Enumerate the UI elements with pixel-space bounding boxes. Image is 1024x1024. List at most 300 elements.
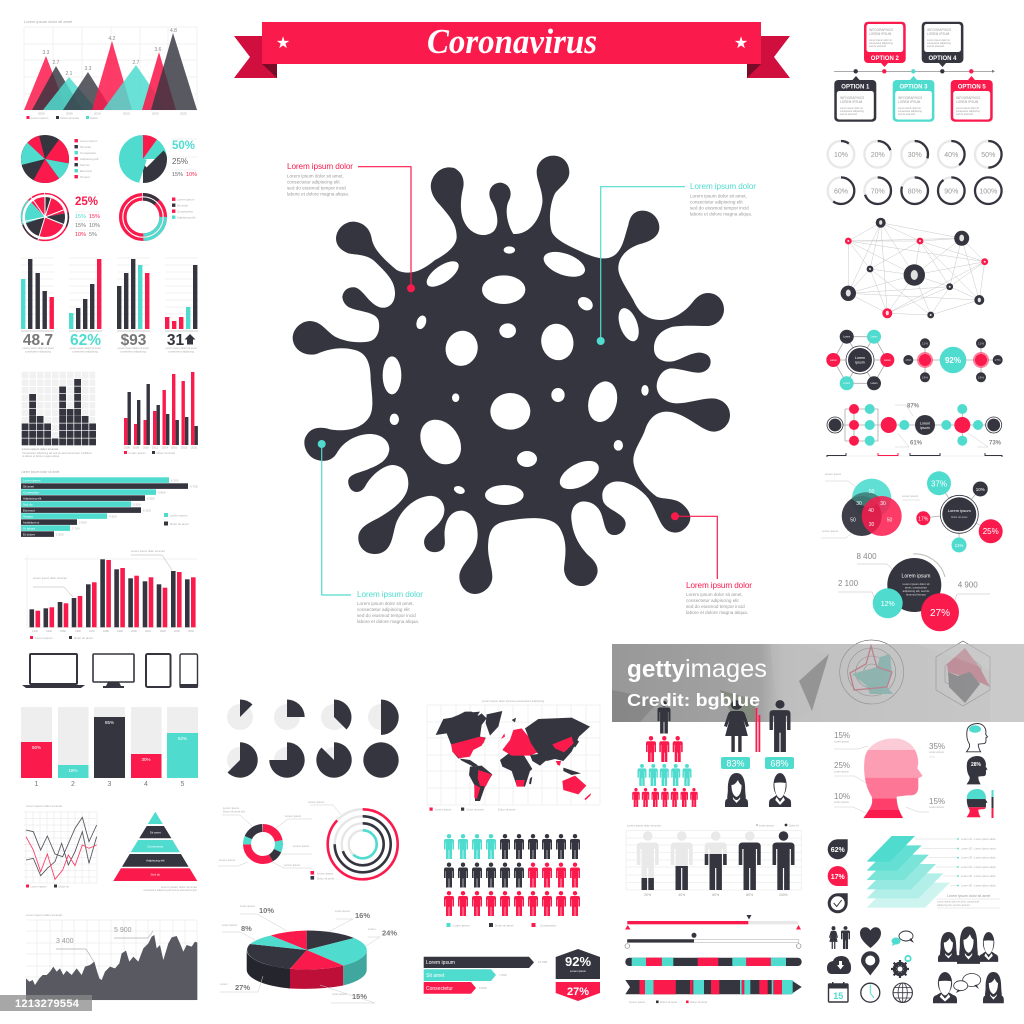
icon: couple bbox=[829, 926, 850, 949]
3d pie chart: 24% bbox=[382, 928, 397, 938]
3d pie chart: 8% bbox=[241, 924, 252, 933]
donut chart with double ring: Sit amet bbox=[177, 204, 188, 208]
option boxes timeline: OPTION 1 bbox=[841, 84, 870, 90]
callout: bottom left: sed do eiusmod tempor incid bbox=[357, 613, 416, 618]
option boxes timeline: LOREM IPSUM bbox=[956, 100, 979, 104]
icon: devices bbox=[22, 654, 198, 688]
92 percent cluster: 18% bbox=[922, 376, 928, 380]
venn diagram: 30 bbox=[856, 501, 862, 507]
callout: bottom left: consectetur adipiscing elit bbox=[357, 607, 410, 612]
horizontal bar chart bbox=[21, 470, 198, 537]
bubble cluster: 11% bbox=[955, 543, 963, 548]
triangle chart: 2.7 bbox=[133, 60, 140, 66]
icon: head set: 28% bbox=[971, 762, 982, 768]
option boxes timeline: LOREM IPSUM bbox=[898, 100, 921, 104]
teardrop stats: 62% bbox=[831, 847, 845, 854]
horizontal bar chart: Adipiscing elit bbox=[23, 496, 42, 500]
triangle chart: Dolor sit amet bbox=[60, 116, 79, 120]
progress column chart: 85% bbox=[105, 720, 114, 725]
option boxes timeline: sed do eiusmod bbox=[840, 113, 858, 116]
option boxes timeline: INFOGRAPHICS bbox=[869, 28, 893, 32]
callout: top right: Lorem ipsum dolor sit amet, bbox=[690, 194, 747, 198]
callout: top left bbox=[287, 162, 415, 292]
chain node diagram: Lorem bbox=[920, 422, 930, 426]
horizontal bar chart: 5 500 bbox=[133, 502, 141, 506]
arrow bars: 10 000 bbox=[538, 960, 548, 964]
world map: Dolor sit amet bbox=[466, 808, 484, 812]
pie chart 2 with percentages: 15% bbox=[172, 172, 183, 178]
progress column chart: 62% bbox=[178, 736, 187, 741]
watermark id: 1213279554 bbox=[15, 998, 80, 1010]
watermark id bbox=[0, 995, 92, 1011]
donut chart with callouts: Lorem ipsum bbox=[223, 806, 240, 810]
horizontal bar chart: 9 700 bbox=[190, 484, 198, 488]
column chart with callouts: 2040 bbox=[188, 629, 194, 633]
horizontal bar chart: Et dolore bbox=[23, 532, 35, 536]
arrow bars: Sit amet bbox=[426, 973, 445, 979]
option boxes timeline: consectetur adipiscing bbox=[927, 42, 951, 45]
pie chart 3 exploded: 10% bbox=[89, 223, 100, 229]
triangle chart: 2025 bbox=[180, 112, 187, 116]
paired bar chart: 2010 bbox=[143, 446, 150, 450]
donut chart with callouts: Lorem ipsum bbox=[219, 858, 236, 862]
watermark text bbox=[627, 655, 767, 710]
world map: Lorem ipsum dolor sit amet consectetur adipiscing bbox=[482, 699, 545, 703]
paired bar chart: 2016 bbox=[171, 446, 178, 450]
progress column chart: 30% bbox=[141, 757, 151, 762]
pyramid chart: Sed do bbox=[151, 872, 160, 876]
pyramid chart: Adipiscing elit bbox=[146, 858, 165, 862]
pie chart 1: Sit amet bbox=[80, 145, 91, 149]
icon: calendar bbox=[828, 982, 848, 1002]
percentage ring set: 80% bbox=[908, 188, 922, 195]
column chart with callouts: Lorem ipsum dolor sit amet bbox=[33, 576, 67, 580]
concentric ring chart: Lorem ipsum bbox=[317, 872, 334, 876]
icon: globe bbox=[893, 983, 912, 1002]
option boxes timeline: LOREM IPSUM bbox=[869, 32, 892, 36]
head segmented chart: 15% bbox=[834, 731, 850, 740]
percentage ring set: 50% bbox=[981, 152, 995, 159]
callout: bottom left bbox=[318, 440, 423, 624]
hexagon stats: 92% bbox=[565, 954, 591, 969]
watermark overlay bbox=[612, 644, 1024, 722]
horizontal bar chart: Sit amet bbox=[23, 484, 34, 488]
progress column chart: 4 bbox=[144, 781, 148, 788]
big bubble stats: 4 900 bbox=[958, 580, 978, 590]
people pictogram grid bbox=[444, 834, 580, 928]
icon: heart bbox=[860, 927, 881, 948]
percentage ring set: 10% bbox=[834, 152, 848, 159]
hexagon node diagram: Lorem bbox=[871, 382, 877, 385]
paired bar chart: 2006 bbox=[124, 446, 131, 450]
chain node diagram bbox=[827, 404, 1002, 457]
horizontal bar chart: Lorem ipsum bbox=[23, 478, 41, 482]
option boxes timeline: sed do eiusmod bbox=[956, 113, 974, 116]
horizontal bar chart: Tempor bbox=[23, 514, 33, 518]
column chart with callouts: 1950 bbox=[60, 629, 66, 633]
callout: top right: consectetur adipiscing elit bbox=[690, 200, 743, 204]
column chart with callouts: 1960 bbox=[75, 629, 81, 633]
callout: bottom right bbox=[671, 512, 752, 615]
pie chart 1: Consectetur bbox=[80, 151, 96, 155]
arrow bars: 7 000 bbox=[499, 973, 507, 977]
big bubble stats: 8 400 bbox=[856, 552, 877, 561]
horizontal bar chart: Sed do bbox=[23, 502, 33, 506]
line chart: Dolor sit bbox=[58, 884, 69, 888]
hexagon node diagram: Lorem bbox=[855, 356, 865, 360]
donut chart with callouts: Lorem ipsum bbox=[284, 863, 301, 867]
triangle chart: 3.3 bbox=[85, 66, 92, 72]
venn diagram: Lorem ipsum bbox=[902, 494, 919, 498]
triangle chart: Lorem ipsum bbox=[31, 116, 49, 120]
people pictogram grid: Consectetur bbox=[540, 924, 556, 928]
paired bar chart bbox=[124, 372, 198, 455]
progress column chart: 18% bbox=[68, 768, 78, 773]
virus illustration bbox=[293, 156, 730, 594]
option boxes timeline: sed do eiusmod bbox=[927, 45, 945, 48]
option boxes timeline: OPTION 5 bbox=[958, 84, 986, 90]
arrow bars: Consectetur bbox=[426, 986, 453, 992]
horizontal bar chart: 4 300 bbox=[109, 514, 117, 518]
donut chart with callouts: Lorem ipsum bbox=[293, 844, 310, 848]
title banner: ★ bbox=[276, 35, 290, 52]
pictogram height chart: 80% bbox=[746, 893, 753, 897]
area chart: Lorem ipsum dolor sit amet bbox=[26, 913, 62, 917]
callout: top left: consectetur adipiscing elit bbox=[287, 180, 340, 184]
option boxes timeline: sed do eiusmod bbox=[869, 45, 887, 48]
paired bar chart: 2014 bbox=[162, 446, 169, 450]
pie chart 3 exploded bbox=[22, 194, 100, 240]
horizontal bar chart: Lorem ipsum dolor sit amet bbox=[21, 470, 60, 474]
head segmented chart: 25% bbox=[834, 761, 850, 770]
92 percent cluster: 16% bbox=[905, 358, 912, 362]
chain node diagram: 87% bbox=[907, 404, 920, 410]
hexagon stats: Lorem ipsum bbox=[570, 969, 587, 973]
option boxes timeline: INFOGRAPHICS bbox=[840, 96, 864, 100]
option boxes timeline: consectetur adipiscing bbox=[956, 110, 980, 113]
bar chart group with stats: 31 bbox=[167, 332, 184, 349]
horizontal bar chart: Consectetur bbox=[23, 490, 39, 494]
option boxes timeline: Lorem ipsum dolor sit bbox=[898, 107, 921, 110]
big bubble stats: 12% bbox=[881, 601, 895, 608]
pie chart 2 with percentages: 50% bbox=[172, 140, 195, 152]
icon: clock bbox=[861, 983, 880, 1002]
big bubble stats: 27% bbox=[930, 608, 950, 619]
column chart with callouts: 1980 bbox=[103, 629, 109, 633]
head segmented chart: Lorem ipsum bbox=[929, 750, 944, 754]
horizontal bar chart: 2 700 bbox=[72, 526, 80, 530]
layered stack chart bbox=[867, 836, 1000, 908]
pyramid chart: Sit amet bbox=[150, 830, 161, 834]
triangle chart: 4.8 bbox=[170, 28, 177, 34]
horizontal bar chart: 1 900 bbox=[56, 532, 64, 536]
big bubble stats: eiusmod tempor bbox=[906, 592, 926, 596]
pie chart 1: Tempor bbox=[80, 175, 90, 179]
gender statistics bbox=[721, 700, 794, 807]
3d pie chart: Lorem bbox=[220, 982, 227, 986]
triangle chart: 2020 bbox=[152, 112, 159, 116]
head segmented chart: Lorem ipsum bbox=[834, 800, 849, 804]
percentage ring set: 30% bbox=[908, 152, 922, 159]
donut chart with double ring: Consectetur bbox=[177, 210, 193, 214]
pictogram height chart: 40% bbox=[678, 893, 685, 897]
triangle chart: 2005 bbox=[66, 112, 73, 116]
head segmented chart: 35% bbox=[929, 742, 945, 751]
people pictogram grid: Dolor sit amet bbox=[495, 924, 514, 928]
percentage ring set: 40% bbox=[944, 152, 958, 159]
bar chart group with stats: 62% bbox=[70, 332, 101, 349]
pie chart 1 bbox=[33, 139, 99, 179]
column chart with callouts: 2030 bbox=[174, 629, 180, 633]
option boxes timeline: sed do eiusmod bbox=[898, 113, 916, 116]
watermark text: getty bbox=[627, 656, 686, 683]
area chart: 5 900 bbox=[114, 927, 132, 934]
callout: bottom right: Lorem ipsum dolor bbox=[686, 581, 752, 590]
callout: bottom left: Lorem ipsum dolor bbox=[357, 590, 423, 599]
percentage ring set: 20% bbox=[871, 152, 885, 159]
92 percent cluster: 18% bbox=[978, 376, 984, 380]
option boxes timeline: consectetur adipiscing bbox=[898, 110, 922, 113]
arrow segmented bar: Dolor sit amet bbox=[660, 1000, 677, 1004]
option boxes timeline: OPTION 3 bbox=[899, 84, 928, 90]
triangle chart: 4.2 bbox=[109, 36, 116, 42]
callout: top right bbox=[597, 182, 756, 345]
bar chart group with stats: consectetur adipiscing bbox=[72, 350, 98, 354]
watermark text: images bbox=[685, 655, 767, 683]
pie chart 3 exploded: 15% bbox=[75, 214, 86, 220]
layered stack chart: Lorem ipsum dolor sit amet bbox=[947, 894, 990, 898]
icon: people talking bbox=[933, 972, 1004, 1003]
pictogram height chart: Lorem ipsum dolor sit amet bbox=[627, 824, 661, 828]
watermark text: Credit: bgblue bbox=[627, 690, 760, 710]
column chart with callouts bbox=[24, 549, 197, 640]
92 percent cluster: 12% bbox=[978, 342, 984, 346]
big bubble stats: adipiscing elit, sed do bbox=[903, 589, 930, 593]
92 percent cluster bbox=[903, 338, 1003, 382]
people pictogram grid: Lorem ipsum bbox=[452, 924, 470, 928]
line chart: Lorem ipsum bbox=[30, 884, 47, 888]
pie chart 1: Adipiscing elit bbox=[80, 157, 99, 161]
horizontal bar chart: Lorem ipsum bbox=[170, 514, 188, 518]
donut chart with callouts bbox=[218, 806, 312, 868]
percentage ring set bbox=[828, 141, 1002, 204]
triangle chart: 2015 bbox=[123, 112, 130, 116]
title banner: Coronavirus bbox=[427, 22, 597, 61]
3d pie chart: Lorem ipsum bbox=[332, 992, 347, 996]
head segmented chart: Lorem ipsum bbox=[834, 740, 849, 744]
people pyramid bbox=[632, 701, 698, 807]
percentage ring set: 90% bbox=[944, 188, 958, 195]
bar chart group with stats: consectetur adipiscing bbox=[25, 350, 51, 354]
bar chart group with stats: $93 bbox=[121, 332, 147, 349]
column chart with callouts: 1930 bbox=[32, 629, 38, 633]
layered stack chart: Lorem 05 - Lorem ipsum dolor bbox=[961, 874, 996, 878]
arrow bars: 5 000 bbox=[479, 986, 487, 990]
title banner: ★ bbox=[734, 35, 748, 52]
3d pie chart: 15% bbox=[352, 992, 367, 1001]
donut chart with double ring: Lorem ipsum bbox=[177, 198, 195, 202]
column chart with callouts: 1970 bbox=[89, 629, 95, 633]
paired bar chart: 2008 bbox=[133, 446, 140, 450]
pyramid chart: Lorem ipsum dolor sit amet bbox=[161, 885, 197, 889]
layered stack chart: Lorem 06 - Lorem ipsum dolor bbox=[961, 884, 996, 888]
column chart with callouts: 1940 bbox=[46, 629, 52, 633]
92 percent cluster: 27% bbox=[995, 358, 1001, 362]
donut chart with callouts: Dolor sit amet elit bbox=[223, 810, 245, 814]
option boxes timeline: Lorem ipsum dolor sit bbox=[927, 39, 950, 42]
hexagon stats: 27% bbox=[567, 986, 589, 998]
92 percent cluster: 92% bbox=[945, 356, 961, 365]
head segmented chart bbox=[834, 731, 945, 818]
callout: bottom left: labore et dolore magna aliqua. bbox=[357, 619, 419, 624]
progress column chart: 50% bbox=[32, 745, 41, 750]
hexagon stats bbox=[556, 949, 600, 1001]
gender statistics: 83% bbox=[726, 758, 745, 768]
big bubble stats: 2 100 bbox=[838, 579, 859, 588]
3d pie chart: 27% bbox=[235, 983, 250, 992]
callout: top right: Lorem ipsum dolor bbox=[690, 182, 756, 191]
layered stack chart: Lorem 01 - Lorem ipsum dolor bbox=[961, 837, 996, 841]
concentric ring chart: Dolor sit amet bbox=[317, 876, 334, 880]
layered stack chart: Lorem 02 - Lorem ipsum dolor bbox=[961, 846, 996, 850]
waffle bar chart: ut labore et dolore magna aliqua bbox=[22, 454, 60, 458]
triangle chart: 2000 bbox=[38, 112, 45, 116]
pie progression set bbox=[227, 699, 399, 778]
horizontal bar chart: Dolor sit amet bbox=[170, 522, 189, 526]
callout: top left: sed do eiusmod tempor incid bbox=[287, 186, 346, 190]
pyramid chart: Consectetur adipiscing elit sed do eiusmod tempor bbox=[143, 889, 197, 892]
chain node diagram: ipsum bbox=[920, 426, 930, 430]
column chart with callouts: Lorem ipsum dolor sit amet bbox=[131, 549, 165, 553]
bubble cluster: Dolor sit amet bbox=[951, 515, 968, 519]
percentage ring set: 100% bbox=[979, 188, 997, 195]
callout: top left: labore et dolore magna aliqua. bbox=[287, 192, 349, 196]
triangle chart: Dolor bbox=[90, 116, 98, 120]
segmented bar bbox=[625, 958, 802, 966]
venn diagram: 50 bbox=[869, 489, 875, 495]
horizontal bar chart: 6 300 bbox=[147, 496, 155, 500]
callout: top right: sed do eiusmod tempor incid bbox=[690, 206, 749, 210]
horizontal bar chart: 6 100 bbox=[143, 508, 151, 512]
venn diagram: 50 bbox=[850, 518, 856, 524]
waffle bar chart: Lorem ipsum dolor sit amet bbox=[22, 447, 58, 451]
venn diagram: 30 bbox=[869, 522, 874, 528]
column chart with callouts: 2000 bbox=[131, 629, 137, 633]
line chart: Lorem ipsum dolor sit amet bbox=[26, 804, 62, 808]
triangle chart bbox=[24, 19, 197, 120]
3d pie chart: Lorem ipsum bbox=[222, 923, 237, 927]
option boxes timeline: OPTION 2 bbox=[871, 56, 899, 62]
callout: top left: Lorem ipsum dolor bbox=[287, 162, 353, 171]
slider dark bbox=[625, 933, 801, 948]
bar chart group with stats: Lorem ipsum dolor sit amet bbox=[22, 346, 54, 350]
pictogram height chart: 60% bbox=[712, 893, 719, 897]
donut chart with callouts: Lorem ipsum bbox=[285, 814, 302, 818]
donut chart with double ring bbox=[121, 195, 196, 239]
icon: gears bbox=[891, 956, 911, 978]
paired bar chart: 2018 bbox=[181, 446, 188, 450]
bubble cluster bbox=[916, 471, 1003, 552]
option boxes timeline: INFOGRAPHICS bbox=[898, 96, 922, 100]
bar chart group with stats: 48.7 bbox=[23, 332, 53, 349]
arrow segmented bar: Lorem ipsum bbox=[629, 1000, 646, 1004]
bar chart group with stats: Lorem ipsum dolor sit amet bbox=[165, 346, 197, 350]
waffle bar chart bbox=[21, 371, 96, 458]
venn diagram: 40 bbox=[868, 508, 874, 514]
paired bar chart: 2020 bbox=[191, 446, 198, 450]
pie chart 3 exploded: 10% bbox=[75, 232, 86, 238]
radar charts bbox=[840, 640, 990, 706]
option boxes timeline: Lorem ipsum dolor sit bbox=[956, 107, 979, 110]
pyramid chart bbox=[113, 812, 197, 892]
area chart bbox=[26, 913, 197, 1000]
bubble cluster: 25% bbox=[983, 527, 999, 536]
paired bar chart: Lorem ipsum bbox=[128, 451, 146, 455]
triangle chart: 3.3 bbox=[43, 50, 50, 56]
pie chart 1: Lorem ipsum bbox=[80, 139, 98, 143]
paired bar chart: 2012 bbox=[152, 446, 159, 450]
horizontal bar chart: 2 900 bbox=[79, 520, 87, 524]
chain node diagram: 73% bbox=[989, 440, 1002, 446]
pictogram height chart bbox=[626, 824, 802, 897]
big bubble stats: amet, consectetur bbox=[905, 586, 927, 590]
hexagon node diagram: Lorem bbox=[843, 336, 850, 338]
option boxes timeline: consectetur adipiscing bbox=[869, 42, 893, 45]
bubble cluster: 17% bbox=[918, 516, 929, 522]
horizontal bar chart: Eiusmod bbox=[23, 508, 35, 512]
hexagon node diagram bbox=[826, 330, 894, 390]
head segmented chart: Lorem ipsum bbox=[834, 770, 849, 774]
percentage ring set: 60% bbox=[834, 188, 848, 195]
pie chart 1: Sed do bbox=[80, 163, 90, 167]
callout: bottom right: Lorem ipsum dolor sit amet, bbox=[686, 592, 743, 597]
venn diagram: 30 bbox=[880, 501, 886, 507]
venn diagram: 50 bbox=[887, 518, 892, 524]
pie chart 3 exploded: 15% bbox=[89, 214, 100, 220]
option boxes timeline: LOREM IPSUM bbox=[840, 100, 863, 104]
column chart with callouts: Lorem ipsum bbox=[35, 636, 53, 640]
callout: top right: labore et dolore magna aliqua. bbox=[690, 212, 752, 216]
option boxes timeline: INFOGRAPHICS bbox=[927, 28, 951, 32]
3d pie chart: Lorem ipsum bbox=[240, 904, 255, 908]
pyramid chart: Consectetur bbox=[147, 844, 163, 848]
network diagram bbox=[841, 218, 988, 318]
progress column chart: 1 bbox=[35, 781, 39, 788]
horizontal bar chart: Incididunt ut bbox=[23, 520, 39, 524]
3d pie chart: Lorem bbox=[368, 927, 375, 931]
venn diagram: Lorem ipsum bbox=[825, 472, 842, 476]
callout: bottom right: labore et dolore magna aliqua. bbox=[686, 610, 748, 615]
world map bbox=[427, 699, 600, 812]
callout: bottom left: Lorem ipsum dolor sit amet, bbox=[357, 601, 414, 606]
triangle chart: Lorem ipsum dolor sit amet bbox=[24, 19, 73, 24]
pie chart 2 with percentages: 25% bbox=[172, 157, 188, 166]
option boxes timeline: Lorem ipsum dolor sit bbox=[869, 39, 892, 42]
callout: top left: Lorem ipsum dolor sit amet, bbox=[287, 174, 344, 178]
3d pie chart bbox=[220, 904, 397, 1003]
pictogram height chart: Lorem ipsum bbox=[759, 824, 774, 828]
layered stack chart: Lorem ipsum dolor sit amet, consectetur bbox=[937, 900, 980, 904]
slider red bbox=[625, 915, 801, 930]
bar chart group with stats bbox=[21, 258, 198, 354]
head segmented chart: 10% bbox=[834, 792, 850, 801]
chain node diagram: 61% bbox=[910, 440, 923, 446]
callout: bottom right: consectetur adipiscing elit bbox=[686, 598, 739, 603]
waffle bar chart: Consectetur adipiscing elit sed do eiusmod tempor incididunt bbox=[22, 451, 92, 455]
3d pie chart: 10% bbox=[259, 906, 274, 915]
concentric ring chart: Lorem ipsum bbox=[308, 800, 325, 804]
pie chart 2 with percentages bbox=[131, 139, 197, 178]
